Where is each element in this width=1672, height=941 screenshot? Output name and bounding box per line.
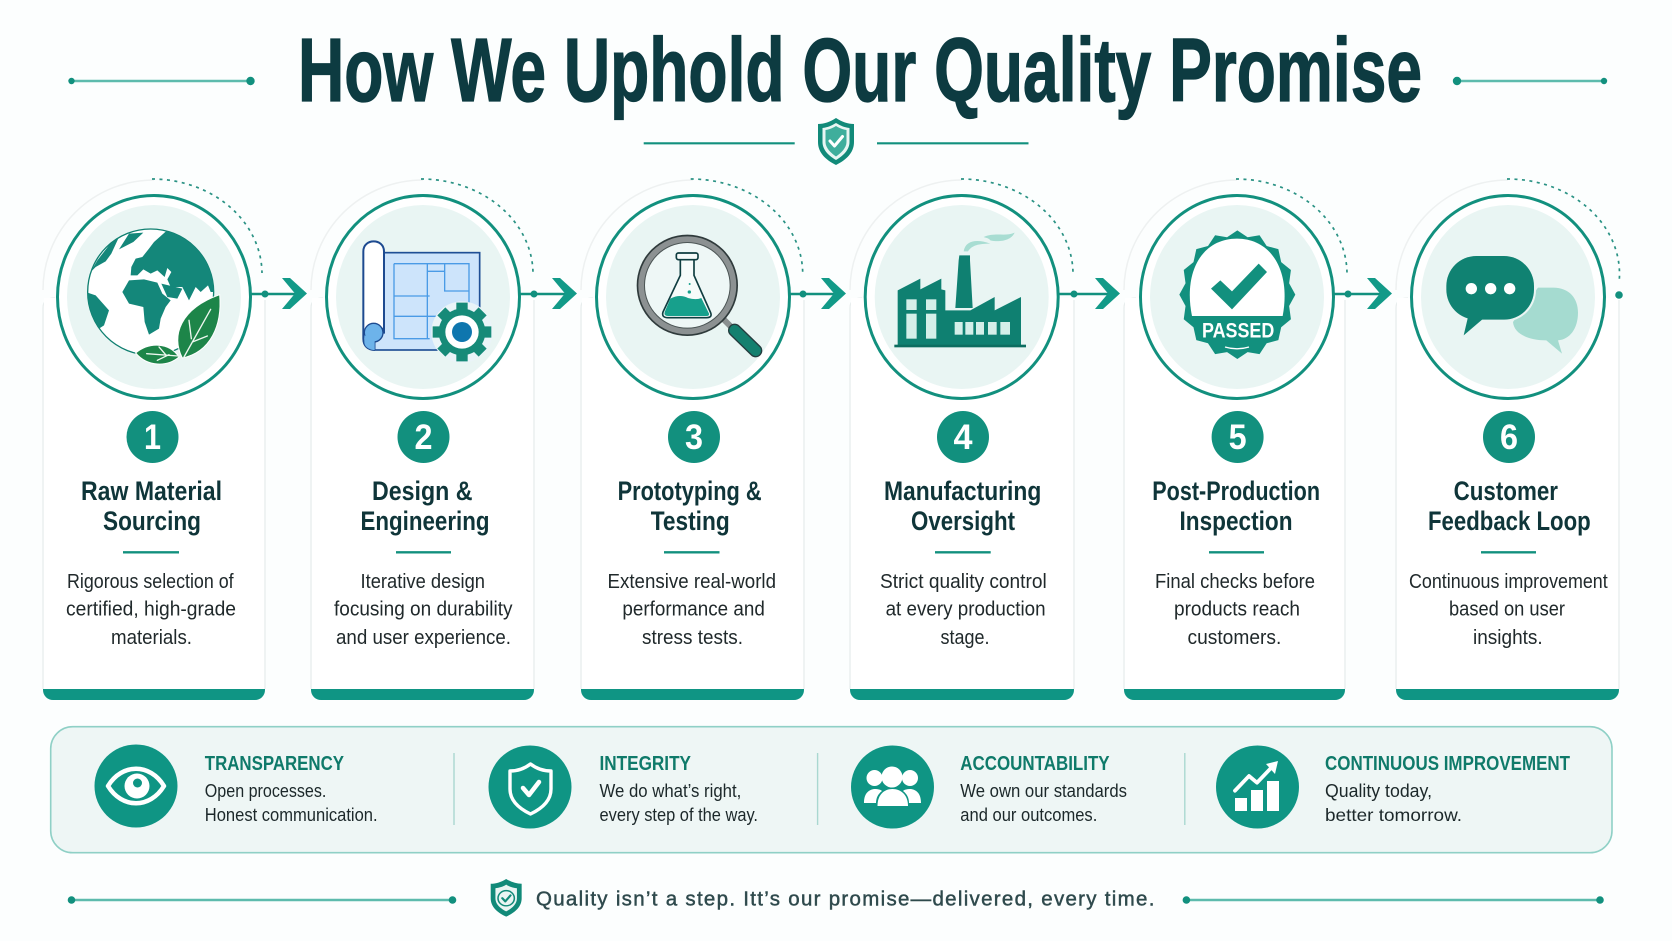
icon: header shield xyxy=(818,118,854,165)
value: transparency: Honest communication. xyxy=(205,804,378,825)
heading: Manufacturing xyxy=(884,476,1041,506)
panel: step 6 Customer Feedback Loop xyxy=(1396,179,1623,700)
description: stress tests. xyxy=(642,626,743,649)
description xyxy=(608,570,776,649)
heading: Oversight xyxy=(911,506,1015,536)
icon: factory xyxy=(894,233,1026,347)
footer: right line xyxy=(1183,896,1604,904)
step number 4: 4 xyxy=(954,418,973,457)
description: certified, high-grade xyxy=(66,598,236,621)
step number 2: 2 xyxy=(414,418,432,457)
description: materials. xyxy=(111,626,192,649)
value: accountability: ACCOUNTABILITY xyxy=(960,752,1110,775)
icon: people xyxy=(851,746,934,828)
step number 4 xyxy=(937,411,989,463)
footer: left line xyxy=(68,896,456,904)
value: accountability: We own our standards xyxy=(960,780,1127,801)
description: customers. xyxy=(1188,626,1281,649)
heading xyxy=(884,476,1041,536)
icon: passed badge xyxy=(1179,230,1295,359)
heading: Inspection xyxy=(1180,506,1292,536)
icon: footer shield xyxy=(491,879,522,917)
icon: passed badge: PASSED xyxy=(1202,319,1274,343)
icon: growth chart xyxy=(1216,746,1299,828)
step number 1 xyxy=(126,411,178,463)
heading xyxy=(1428,476,1591,536)
panel: step 1 Raw Material Sourcing xyxy=(43,179,265,700)
heading xyxy=(618,476,762,536)
value: integrity: We do what’s right, xyxy=(600,780,741,801)
value: accountability: and our outcomes. xyxy=(960,804,1097,825)
value: integrity xyxy=(488,746,758,828)
description: at every production xyxy=(886,598,1046,621)
description xyxy=(880,570,1047,649)
description: Strict quality control xyxy=(880,570,1047,593)
step circle xyxy=(58,196,250,398)
icon: globe with leaves xyxy=(86,225,221,364)
value: transparency xyxy=(94,744,378,828)
step circle xyxy=(1412,196,1604,398)
heading xyxy=(360,476,490,536)
step number 5 xyxy=(1212,411,1264,463)
heading: Post-Production xyxy=(1152,476,1320,506)
panel: step 2 Design & Engineering xyxy=(311,179,534,700)
description: Rigorous selection of xyxy=(67,570,234,593)
value: transparency: TRANSPARENCY xyxy=(205,752,344,775)
heading: Prototyping & xyxy=(618,476,762,506)
step number 3 xyxy=(668,411,720,463)
header ornament: right line xyxy=(1453,77,1607,85)
description: Extensive real-world xyxy=(608,570,776,593)
step circle xyxy=(596,196,790,398)
description: Final checks before xyxy=(1155,570,1315,593)
heading: Engineering xyxy=(360,506,490,536)
icon: chat bubbles xyxy=(1444,254,1578,354)
description: performance and xyxy=(622,598,765,621)
arrow 5 to 6 xyxy=(1333,278,1392,309)
icon: magnifier over flask xyxy=(637,235,756,351)
value: continuous improvement xyxy=(1216,746,1570,828)
description xyxy=(1409,570,1608,649)
step number 5: 5 xyxy=(1229,418,1247,457)
arrow 2 to 3 xyxy=(520,278,577,309)
arrow 4 to 5 xyxy=(1059,278,1120,309)
step number 6: 6 xyxy=(1500,418,1518,457)
description: Iterative design xyxy=(360,570,485,593)
description: based on user xyxy=(1449,598,1565,621)
panel: step 5 Post-Production Inspection xyxy=(1124,179,1347,700)
description: products reach xyxy=(1174,598,1300,621)
step circle xyxy=(1140,196,1334,398)
description xyxy=(334,570,513,649)
arrow 1 to 2 xyxy=(251,278,307,309)
arrow 3 to 4 xyxy=(789,278,846,309)
heading xyxy=(1152,476,1320,536)
value: continuous improvement: Quality today, xyxy=(1325,780,1432,801)
heading: Customer xyxy=(1454,476,1558,506)
description: stage. xyxy=(940,626,990,649)
step number 1: 1 xyxy=(144,418,161,457)
description xyxy=(1155,570,1315,649)
title underline with shield xyxy=(644,118,1028,165)
heading: Feedback Loop xyxy=(1428,506,1591,536)
value: integrity: every step of the way. xyxy=(600,804,758,825)
heading: Sourcing xyxy=(103,506,201,536)
heading: Design & xyxy=(372,476,472,506)
value: continuous improvement: CONTINUOUS IMPROVEMENT xyxy=(1325,752,1570,775)
step circle xyxy=(865,196,1058,398)
panel: values strip xyxy=(51,727,1612,853)
value: integrity: INTEGRITY xyxy=(600,752,691,775)
header ornament: left line xyxy=(68,77,255,85)
step number 6 xyxy=(1483,411,1535,463)
heading: Raw Material xyxy=(81,476,222,506)
step number 2 xyxy=(398,411,450,463)
description xyxy=(66,570,236,649)
step circle xyxy=(326,196,520,398)
description: Continuous improvement xyxy=(1409,570,1608,593)
panel: step 3 Prototyping & Testing xyxy=(581,179,804,700)
description: focusing on durability xyxy=(334,598,513,621)
icon: shield check xyxy=(488,746,572,828)
value: transparency: Open processes. xyxy=(205,780,326,801)
description: insights. xyxy=(1473,626,1543,649)
heading xyxy=(81,476,222,536)
icon: eye xyxy=(94,744,178,828)
step number 3: 3 xyxy=(685,418,703,457)
heading: Testing xyxy=(651,506,730,536)
value: accountability xyxy=(851,746,1127,828)
value: continuous improvement: better tomorrow. xyxy=(1325,805,1462,825)
panel: step 4 Manufacturing Oversight xyxy=(850,179,1074,700)
closing statement: Quality isn’t a step. Itt’s our promise—delivered, every time. xyxy=(536,888,1154,911)
description: and user experience. xyxy=(336,626,511,649)
icon: blueprint and gear xyxy=(363,241,493,363)
